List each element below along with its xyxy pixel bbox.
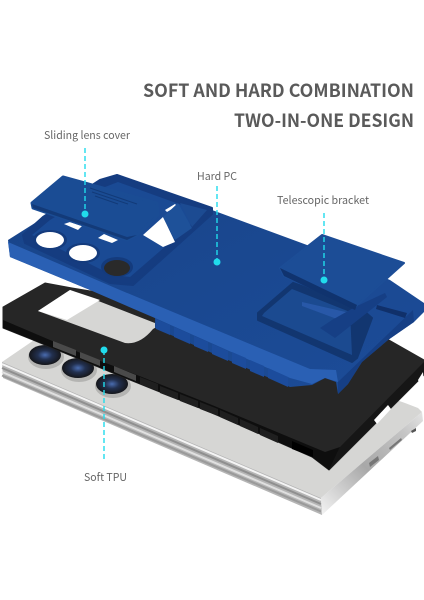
callout: sliding lens cover: [44, 127, 131, 218]
callout: hard PC: [197, 168, 237, 266]
screen window: [38, 290, 160, 343]
title: [143, 77, 414, 133]
title: SOFT AND HARD COMBINATION: [143, 77, 414, 103]
callout: hard PC: Hard PC: [197, 168, 237, 184]
telescopic bracket: [258, 235, 407, 362]
lens opening one: [33, 230, 67, 250]
bracket plate: [280, 235, 404, 307]
callout: soft TPU: [84, 346, 127, 485]
soft TPU case: [3, 283, 424, 470]
side grip blocks: [53, 341, 313, 457]
bracket slot: [376, 305, 407, 318]
lens opening two: [66, 243, 100, 263]
camera module frame: [23, 175, 212, 285]
callout: soft TPU: Soft TPU: [84, 469, 127, 485]
silver phone: [2, 295, 423, 515]
hard PC blue case: [8, 175, 424, 394]
callout: telescopic bracket: Telescopic bracket: [277, 192, 369, 208]
chrome edge stripes: [2, 364, 321, 512]
side button cutouts: [374, 405, 391, 424]
title: TWO-IN-ONE DESIGN: [234, 107, 414, 133]
bracket arm: [320, 293, 387, 338]
white cutouts: [143, 217, 175, 247]
case bright side band: [8, 242, 338, 384]
callout: sliding lens cover: Sliding lens cover: [44, 127, 131, 143]
dark lens opening: [101, 257, 133, 277]
callout: telescopic bracket: [277, 192, 369, 284]
kickstand ramp panels: [163, 203, 192, 240]
case side wall: [3, 320, 340, 470]
right side wall: [338, 310, 414, 394]
camera lenses: [28, 345, 131, 398]
sliding lens cover: [32, 177, 158, 240]
side grip blocks: [156, 319, 288, 387]
icon: usb port: [369, 456, 379, 467]
bracket base frame: [258, 283, 372, 362]
